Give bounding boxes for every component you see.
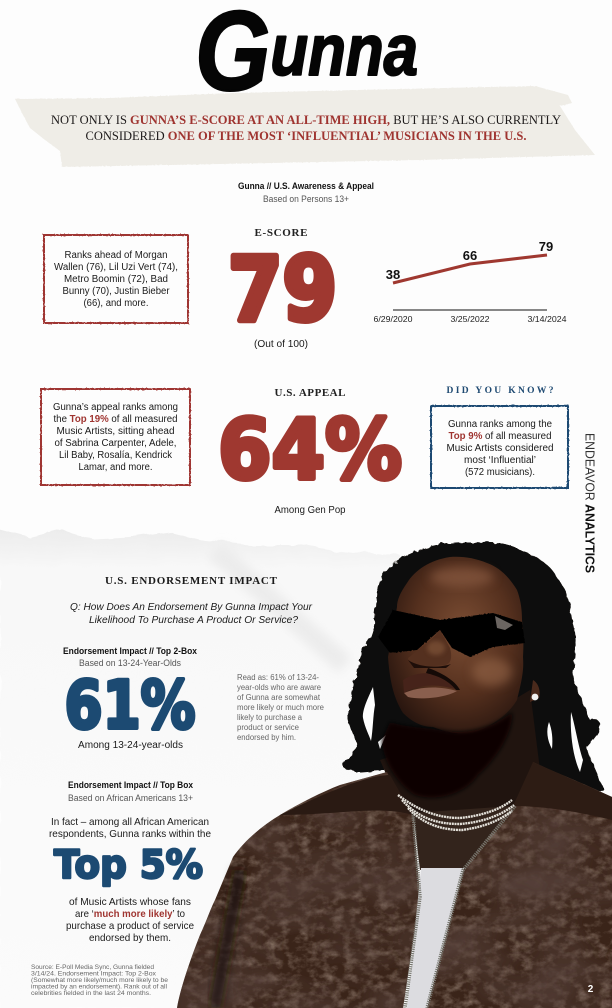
read-as note: endorsed by him. — [237, 733, 296, 742]
source note: celebrities fielded in the last 24 months. — [31, 990, 151, 997]
panel: appeal callout: of Sabrina Carpenter, Adele, — [54, 438, 176, 449]
necklace — [398, 795, 514, 830]
source note: Source: E-Poll Media Sync, Gunna fielded — [31, 964, 154, 971]
stat block: top box: Top 5% — [54, 843, 203, 888]
stat block: top 2-box — [63, 646, 197, 751]
panel: appeal callout: Lil Baby, Rosalía, Kendrick — [59, 450, 173, 461]
panel: rankings callout: (66), and more. — [84, 298, 148, 309]
page number: 2 — [588, 984, 594, 995]
panel: did you know callout: (572 musicians). — [465, 467, 535, 478]
stat block: top box: are ‘much more likely’ to — [75, 908, 185, 920]
panel: appeal callout: the Top 19% of all measured — [54, 414, 178, 425]
read-as note: likely to purchase a — [237, 713, 303, 722]
E-Score stat: E-SCORE — [254, 227, 308, 239]
read-as note: product or service — [237, 723, 300, 732]
stat block: top 2-box: Endorsement Impact // Top 2-Box — [63, 646, 197, 656]
stat block: top box: In fact – among all African American — [51, 816, 209, 828]
stat block: top 2-box: Among 13-24-year-olds — [78, 740, 183, 751]
stat block: top box — [49, 780, 211, 944]
section heading: awareness and appeal: Gunna // U.S. Awareness & Appeal — [238, 181, 374, 191]
stat block: top box: Based on African Americans 13+ — [68, 793, 193, 803]
panel: rankings callout: Wallen (76), Lil Uzi Vert (74), — [54, 262, 178, 273]
endorsement heading: Q: How Does An Endorsement By Gunna Impact Your — [70, 601, 312, 613]
read-as note: Read as: 61% of 13-24- — [237, 673, 319, 682]
stat block: top box: respondents, Gunna ranks within the — [49, 828, 211, 840]
endorsement heading: U.S. ENDORSEMENT IMPACT — [105, 575, 278, 587]
line chart: E-Score trend: 38 — [386, 267, 400, 282]
stat block: top box: purchase a product of service — [66, 920, 194, 932]
panel: rankings callout: Ranks ahead of Morgan — [64, 250, 168, 261]
endorsement heading: Likelihood To Purchase A Product Or Service? — [89, 614, 298, 626]
panel: appeal callout: Lamar, and more. — [78, 462, 152, 473]
panel: did you know callout — [431, 406, 568, 488]
stat block: top box: of Music Artists whose fans — [69, 896, 191, 908]
neck and collar shadow — [380, 690, 540, 830]
sunglasses — [378, 610, 525, 657]
U.S. Appeal stat: U.S. APPEAL — [274, 387, 346, 399]
did you know heading: DID YOU KNOW? — [446, 386, 554, 396]
panel: appeal callout: Gunna’s appeal ranks among — [53, 402, 178, 413]
panel: did you know callout: Music Artists considered — [446, 443, 554, 454]
face — [388, 557, 523, 734]
source note: impacted by an endorsement). Rank out of all — [31, 984, 168, 990]
ear and earring — [530, 680, 540, 702]
stat block: top 2-box: 61% — [64, 667, 196, 744]
brand: Endeavor Analytics: ENDEAVOR ANALYTICS — [582, 433, 596, 573]
panel: did you know callout: Gunna ranks among the — [448, 419, 552, 430]
source note — [31, 964, 168, 997]
E-Score stat: 79 — [228, 238, 337, 341]
title: Gunna: unna — [270, 11, 418, 91]
nose — [408, 630, 451, 668]
chest tattoo — [413, 806, 513, 870]
banner text — [51, 112, 562, 143]
panel: did you know callout: Top 9% of all measured — [448, 431, 552, 442]
banner text: CONSIDERED ONE OF THE MOST ‘INFLUENTIAL’ MUSICIANS IN THE U.S. — [86, 128, 526, 143]
stat block: top 2-box: Based on 13-24-Year-Olds — [79, 658, 181, 668]
zippers — [405, 806, 515, 1008]
hair — [343, 541, 603, 795]
section heading: awareness and appeal — [238, 181, 374, 204]
read-as note: year-olds who are aware — [237, 683, 322, 692]
banner text: NOT ONLY IS GUNNA’S E-SCORE AT AN ALL-TIME HIGH, BUT HE’S ALSO CURRENTLY — [51, 112, 562, 127]
beard — [382, 712, 512, 798]
U.S. Appeal stat: 64% — [218, 402, 402, 498]
E-Score stat: (Out of 100) — [254, 339, 308, 350]
endorsement heading — [70, 575, 312, 626]
section heading: awareness and appeal: Based on Persons 13+ — [263, 194, 349, 204]
line chart: E-Score trend — [374, 239, 567, 324]
cheek highlight — [472, 658, 512, 686]
panel: did you know callout: most ‘Influential’ — [464, 455, 536, 466]
line chart: E-Score trend: 3/25/2022 — [450, 315, 490, 324]
source note: 3/14/24. Endorsement Impact: Top 2-Box — [31, 970, 157, 978]
stat block: top box: Endorsement Impact // Top Box — [68, 780, 193, 790]
torn paper tape banner — [15, 86, 595, 167]
panel: rankings callout — [44, 235, 188, 323]
torn paper background — [0, 530, 400, 1008]
line chart: E-Score trend: 3/14/2024 — [528, 315, 567, 324]
source note: (Somewhat more likely/much more likely to be — [31, 977, 168, 984]
panel: appeal callout: Music Artists, sitting ahead — [56, 426, 174, 437]
read-as note: of Gunna are somewhat — [237, 693, 321, 702]
panel: rankings callout: Bunny (70), Justin Bieber — [62, 286, 170, 297]
line chart: E-Score trend: 66 — [463, 248, 477, 263]
line chart: E-Score trend: 6/29/2020 — [374, 315, 413, 324]
jacket — [177, 762, 612, 1008]
read-as note — [237, 673, 325, 742]
forehead highlight — [430, 567, 494, 587]
photo: Gunna — [177, 541, 612, 1008]
gaps between locks — [363, 687, 583, 772]
panel: appeal callout — [41, 389, 190, 485]
read-as note: more likely or much more — [237, 703, 325, 712]
mouth — [403, 668, 460, 698]
line chart: E-Score trend: 79 — [539, 239, 553, 254]
panel: rankings callout: Metro Boomin (72), Bad — [64, 274, 168, 285]
stat block: top box: endorsed by them. — [89, 932, 171, 944]
U.S. Appeal stat: Among Gen Pop — [274, 505, 346, 516]
shirt — [407, 868, 464, 1008]
